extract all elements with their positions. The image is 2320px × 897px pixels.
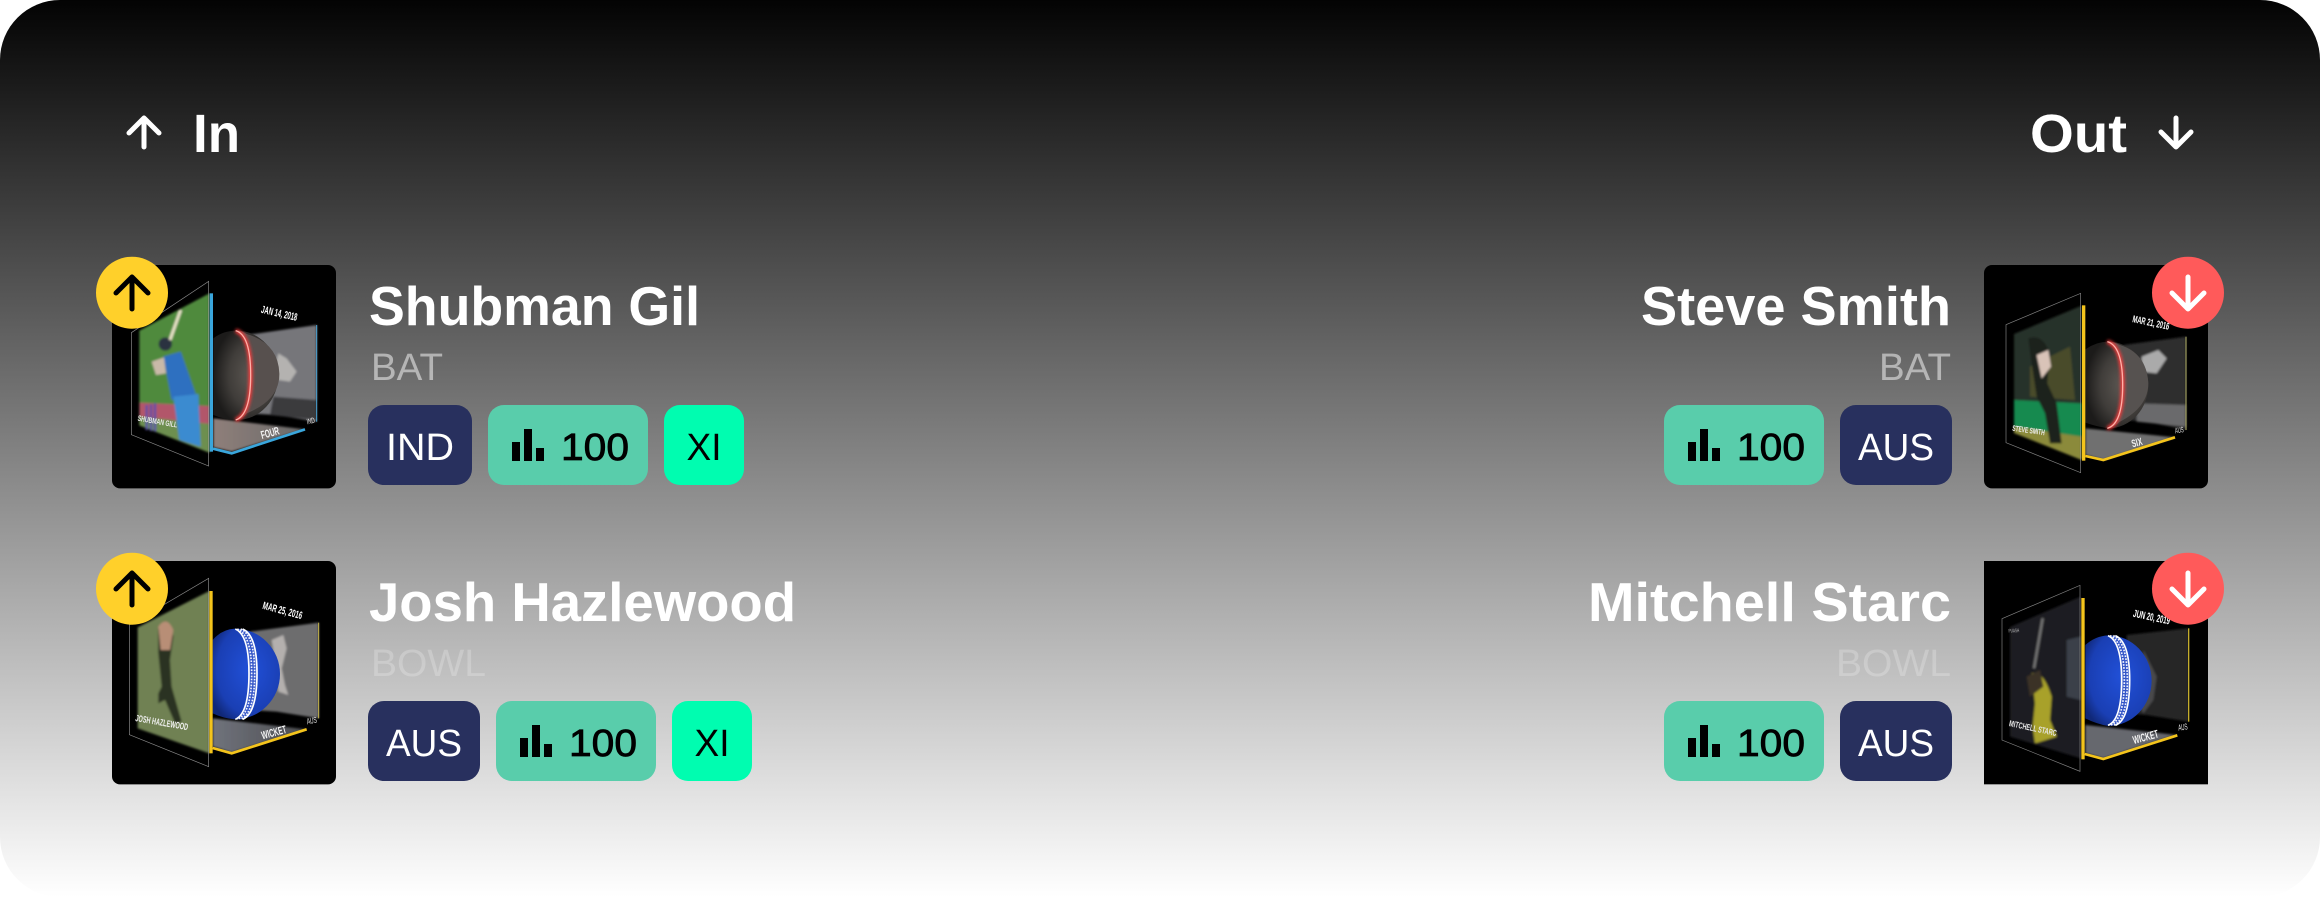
role: BAT bbox=[1879, 347, 1951, 389]
role: BAT bbox=[371, 347, 443, 389]
thumbnail: Steve Smith: AUS bbox=[2174, 425, 2184, 435]
tag: rating: 100 bbox=[1737, 723, 1805, 765]
tag: rating bbox=[488, 405, 648, 485]
thumbnail: Mitchell Starc: AUS bbox=[2178, 721, 2188, 733]
tag: XI bbox=[672, 701, 752, 781]
thumbnail: Shubman Gil: JAN 14, 2018 bbox=[260, 304, 298, 324]
icon: up arrow bbox=[129, 118, 159, 147]
tag: team bbox=[368, 405, 472, 485]
role: BOWL bbox=[1836, 643, 1951, 685]
heading: Out: Out bbox=[2030, 104, 2127, 164]
thumbnail: Steve Smith: STEVE SMITH bbox=[2012, 424, 2045, 437]
role: BOWL bbox=[371, 643, 486, 685]
tag: team bbox=[1840, 405, 1952, 485]
thumbnail: Shubman Gil: SHUBMAN GILL bbox=[137, 414, 178, 430]
thumbnail: Mitchell Starc bbox=[1984, 561, 2208, 784]
badge: down arrow bbox=[2152, 257, 2224, 329]
tag: rating: 100 bbox=[561, 427, 629, 469]
thumbnail: Josh Hazlewood: AUS bbox=[306, 715, 318, 726]
thumbnail: Steve Smith bbox=[1984, 265, 2208, 488]
player card: Steve Smith bbox=[1641, 257, 2224, 488]
thumbnail: Josh Hazlewood: WICKET bbox=[260, 724, 288, 742]
thumbnail: Mitchell Starc: WICKET bbox=[2132, 729, 2160, 747]
thumbnail: Shubman Gil: IND bbox=[306, 416, 316, 426]
thumbnail: Mitchell Starc: JUN 20, 2019 bbox=[2132, 608, 2171, 627]
player card: Josh Hazlewood bbox=[96, 553, 796, 784]
player name: Shubman Gil bbox=[369, 275, 700, 337]
tag: XI: XI bbox=[686, 427, 722, 469]
tag: team: AUS bbox=[386, 723, 462, 765]
tag: rating bbox=[1664, 701, 1824, 781]
tag: XI bbox=[664, 405, 744, 485]
player card: Shubman Gil bbox=[96, 257, 744, 488]
thumbnail: Mitchell Starc: PUASH bbox=[2008, 628, 2020, 635]
thumbnail: Steve Smith: SIX bbox=[2130, 436, 2144, 450]
badge: up arrow bbox=[96, 553, 168, 625]
tag: XI: XI bbox=[694, 723, 730, 765]
player name: Mitchell Starc bbox=[1588, 571, 1951, 633]
player name: Josh Hazlewood bbox=[369, 571, 796, 633]
tag: team bbox=[1840, 701, 1952, 781]
icon: down arrow bbox=[2161, 118, 2191, 147]
thumbnail: Josh Hazlewood bbox=[112, 561, 336, 784]
tag: team bbox=[368, 701, 480, 781]
tag: team: IND bbox=[386, 427, 454, 469]
thumbnail: Steve Smith: MAR 21, 2016 bbox=[2131, 314, 2170, 333]
tag: rating bbox=[1664, 405, 1824, 485]
tag: rating: 100 bbox=[1737, 427, 1805, 469]
heading: In bbox=[129, 104, 240, 164]
thumbnail: Shubman Gil bbox=[112, 265, 336, 488]
tag: team: AUS bbox=[1858, 427, 1934, 469]
player card: Mitchell Starc bbox=[1588, 553, 2224, 784]
tag: team: AUS bbox=[1858, 723, 1934, 765]
thumbnail: Mitchell Starc: MITCHELL STARC bbox=[2008, 718, 2058, 738]
heading: In: In bbox=[193, 104, 240, 164]
thumbnail: Shubman Gil: FOUR bbox=[260, 425, 281, 442]
badge: up arrow bbox=[96, 257, 168, 329]
player name: Steve Smith bbox=[1641, 275, 1951, 337]
thumbnail: Josh Hazlewood: MAR 25, 2016 bbox=[261, 600, 304, 622]
thumbnail: Josh Hazlewood: JOSH HAZLEWOOD bbox=[135, 713, 189, 732]
badge: down arrow bbox=[2152, 553, 2224, 625]
heading: Out bbox=[2030, 104, 2191, 164]
tag: rating: 100 bbox=[569, 723, 637, 765]
tag: rating bbox=[496, 701, 656, 781]
